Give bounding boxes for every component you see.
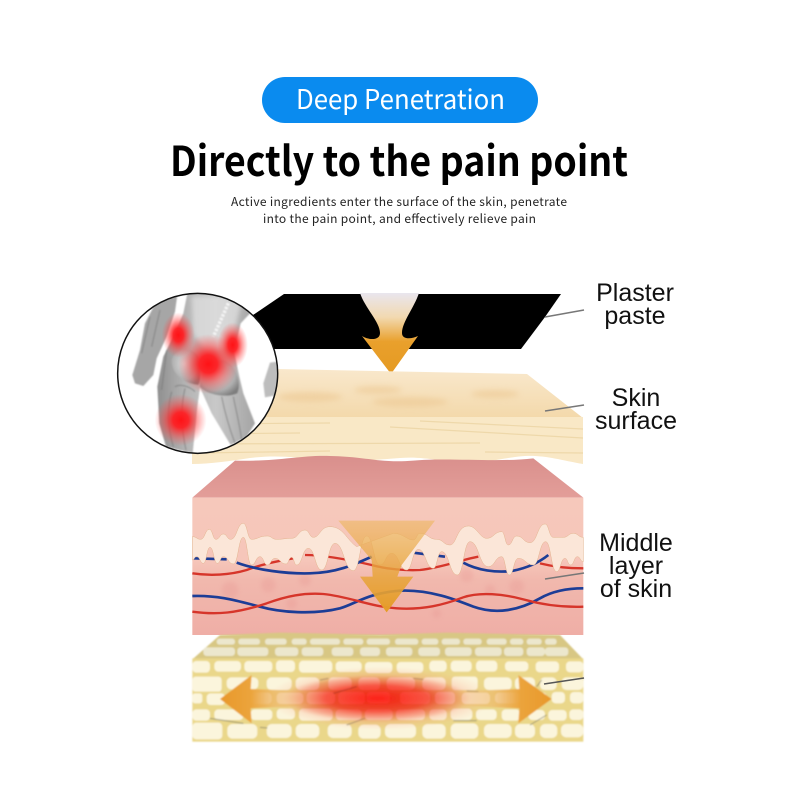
label: Middle layer of skin xyxy=(599,529,673,603)
icon: plaster arrow xyxy=(360,293,419,374)
front face xyxy=(192,658,583,742)
figure: back highlight xyxy=(192,297,243,352)
icon: right arrow xyxy=(447,675,552,723)
badge: Deep Penetration xyxy=(262,77,538,123)
pain point: lower back right xyxy=(218,324,248,366)
icon: left arrow xyxy=(220,675,323,723)
figure: glute right xyxy=(200,373,240,396)
layer: plaster paste xyxy=(253,293,561,374)
cream dermis band xyxy=(192,523,583,575)
layer: middle layer of skin xyxy=(192,456,583,635)
layer: fat cells xyxy=(192,633,583,742)
subtitle text: Active ingredients enter the surface of the skin, penetrate xyxy=(231,193,567,210)
cell cracks xyxy=(210,678,547,728)
inset border xyxy=(118,293,278,453)
icon: middle arrow xyxy=(338,521,435,612)
label: Skin surface xyxy=(595,384,677,435)
pointer: fat layer xyxy=(544,678,584,684)
red pain glow, core xyxy=(283,675,470,722)
top face xyxy=(192,633,583,659)
pointer: middle layer xyxy=(545,573,584,579)
blotches xyxy=(222,568,524,618)
pain point: hip xyxy=(180,336,237,392)
pain point: knee xyxy=(155,394,207,446)
pointer: skin surface xyxy=(545,405,584,411)
red pain glow, soft spread xyxy=(267,667,493,730)
lower red vessel xyxy=(192,594,583,613)
pain point: lower back left xyxy=(163,313,194,356)
inset: body with pain points xyxy=(118,293,278,453)
label: Middle layer of skin: Middle xyxy=(599,529,673,557)
badge: Deep Penetration: Deep Penetration xyxy=(296,78,505,117)
label: Skin surface: Skin xyxy=(612,384,660,412)
label: Skin surface: surface xyxy=(595,407,677,435)
label: Plaster paste: Plaster xyxy=(596,279,674,307)
figure: left arm xyxy=(132,295,177,386)
label: Plaster paste: paste xyxy=(604,302,666,330)
upper red vessels xyxy=(192,555,583,575)
subtitle text: into the pain point, and effectively relieve pain xyxy=(263,210,536,227)
top face xyxy=(192,456,583,498)
lower blue vessel xyxy=(192,588,583,612)
figure: right hand xyxy=(263,362,277,397)
cell rows xyxy=(203,639,568,656)
label: Plaster paste xyxy=(596,279,674,330)
label: Middle layer of skin: layer xyxy=(609,552,663,580)
figure: thigh muscles xyxy=(142,310,242,450)
title: Directly to the pain point xyxy=(170,128,628,188)
upper blue vessels xyxy=(193,553,548,573)
figure: torso and legs xyxy=(157,293,255,453)
subtitle text xyxy=(231,193,567,227)
infographic canvas xyxy=(116,77,676,743)
label: Middle layer of skin: of skin xyxy=(600,575,672,603)
figure: spine xyxy=(213,303,228,337)
pointer: plaster paste xyxy=(545,310,584,317)
layer: skin surface xyxy=(192,369,583,464)
front face xyxy=(192,498,583,635)
figure: glute left xyxy=(172,349,200,385)
